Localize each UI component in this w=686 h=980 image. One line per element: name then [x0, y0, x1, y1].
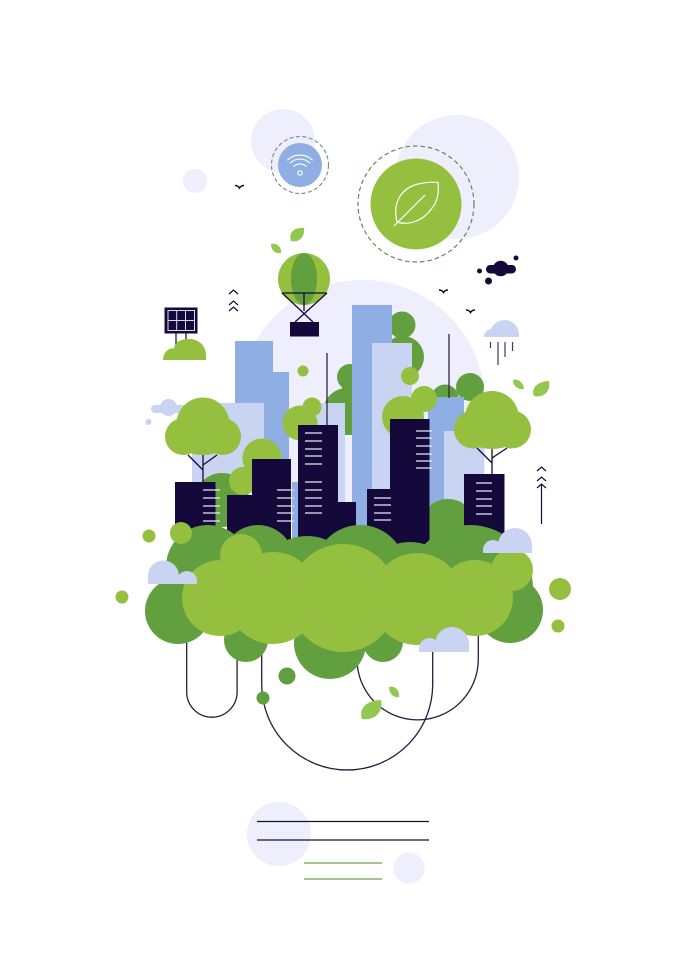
dark green mound behind left buildings [195, 473, 249, 527]
icon: wifi badge [272, 136, 328, 194]
pale cloud left [146, 399, 186, 425]
back trees dark green [323, 312, 484, 436]
antennas [327, 334, 449, 426]
bush under solar panel [163, 339, 206, 360]
birds [235, 186, 475, 312]
dark cloud with dots [477, 256, 518, 284]
pale back buildings [192, 403, 484, 503]
footer text placeholder [247, 802, 429, 884]
building windows [203, 431, 492, 521]
solar panel [163, 308, 206, 360]
pale tall building [372, 343, 412, 500]
loose dots [116, 522, 571, 704]
dark green mound [420, 499, 476, 555]
dark foliage [145, 525, 543, 679]
hot air balloon [278, 253, 330, 336]
pale clouds on island [148, 528, 532, 652]
dark foreground buildings [175, 419, 504, 548]
falling leaves near balloon [271, 228, 304, 253]
foliage island [145, 525, 543, 679]
right arrow [537, 467, 546, 524]
icon: leaf badge [358, 146, 474, 262]
tree left [165, 398, 241, 483]
chevrons left [229, 290, 238, 311]
light foliage [182, 534, 533, 652]
large halo behind city [239, 280, 485, 503]
blue buildings [235, 305, 464, 540]
illustration: eco smart city [116, 109, 571, 884]
rain cloud [484, 320, 519, 365]
mid green trees [229, 366, 437, 495]
background circles top [183, 109, 519, 239]
loose leaves [361, 380, 549, 719]
tree right [454, 391, 531, 476]
hanging loops [187, 625, 478, 770]
